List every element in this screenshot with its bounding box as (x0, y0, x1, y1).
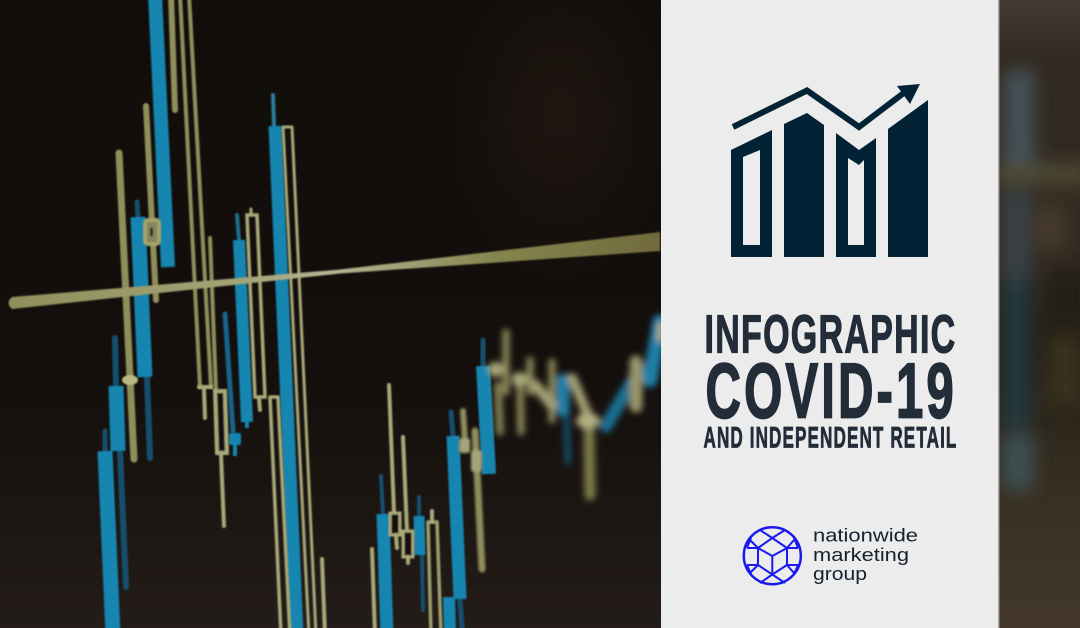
pale hollow candles (199, 127, 441, 628)
logo wordmark (813, 526, 918, 584)
photo background: candlestick chart (0, 0, 680, 628)
subheading: and independent retail: AND INDEPENDENT RETAIL (704, 422, 956, 455)
soft out-of-focus candles (459, 322, 660, 569)
crosshair line (8, 232, 660, 309)
logo wordmark: marketing (813, 545, 909, 565)
logo wordmark: nationwide (813, 526, 918, 546)
olive candles and wicks (119, 0, 216, 459)
heading: INFOGRAPHIC: INFOGRAPHIC (704, 303, 955, 364)
right photo strip (995, 0, 1080, 628)
logo: nationwide marketing group (744, 526, 918, 584)
dim blue wicks (105, 95, 483, 628)
heading: COVID-19: COVID-19 (706, 347, 954, 434)
icon: rising bar chart with arrow (731, 84, 928, 257)
logo mark: faceted circle (744, 527, 801, 584)
white title panel (661, 0, 998, 628)
logo wordmark: group (813, 564, 867, 584)
bright blue candles (105, 0, 489, 628)
